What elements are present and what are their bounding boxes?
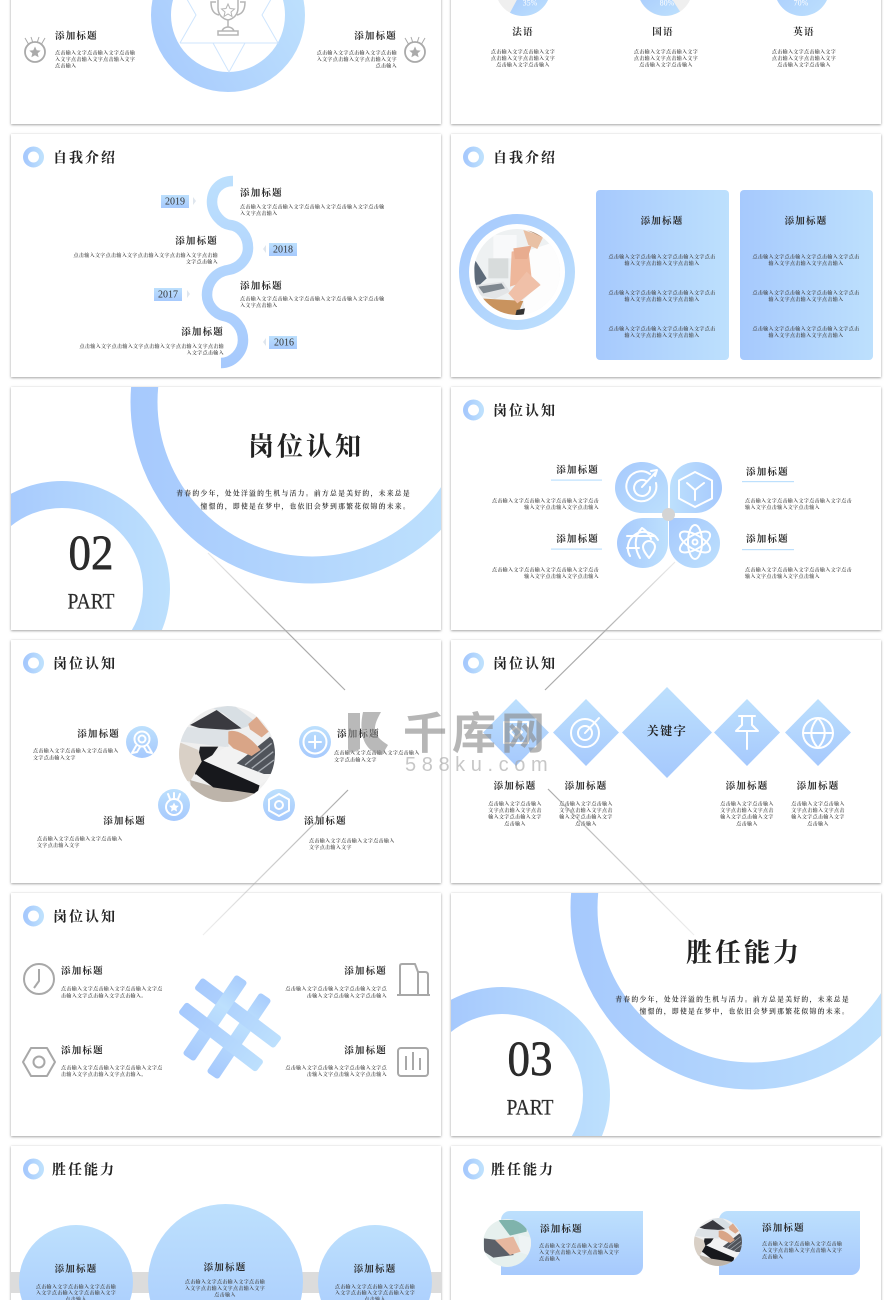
text column 2: 添加标题 [565,780,607,792]
text top-left [492,464,602,511]
body text [176,488,411,512]
circle right: 添加标题 [354,1263,396,1275]
heading: 岗位认知: 岗位认知 [493,656,557,672]
text bottom-right: 添加标题 [746,533,789,545]
panel: profile [451,134,881,377]
text upper-right: 添加标题 [344,965,387,977]
text upper-left: 添加标题 [61,965,104,977]
card one: 添加标题 [540,1223,583,1235]
text top-left: 点击输入文字点击输入文字点击输入文字点击 [492,498,599,504]
text 2019: 入文字点击输入 [240,210,277,217]
card right: 添加标题 [785,215,827,227]
text bottom-left: 点击输入文字点击输入文字点击输入文字点击 [492,566,599,574]
text upper-left: 文字点击输入文字 [33,754,76,762]
text 2016: 添加标题 [181,326,224,338]
text column 4: 添加标题 [797,780,839,792]
text column 3: 输入文字点击输入文字 [720,814,774,820]
text top-left: 添加标题 [556,464,599,476]
text top-left: 输入文字点击输入文字点击输入 [524,504,599,511]
right text block: 点击输入文字点击输入文字点击输 [317,50,397,56]
petal: cube [670,462,722,513]
petal: globe pin [617,518,668,568]
text 2017: 点击输入文字点击输入文字点击输入文字点击输入文字点击输 [240,296,384,302]
column: 法语: 法语 [512,26,534,38]
title: 岗位认知 [248,432,364,462]
card one [501,1211,643,1275]
text 2018: 点击输入文字点击输入文字点击输入文字点击输入文字点击输 [74,252,218,259]
card right: 输入文字点击输入文字点击输入 [769,260,843,267]
text column 1: 文字点击输入文字点击 [488,807,542,814]
watermark url: 588ku.com [405,754,553,776]
heading: 自我介绍 [466,149,557,166]
icon: nut [23,1048,55,1076]
year: 2019: 2019 [165,196,185,208]
text lower-left: 添加标题 [61,1044,104,1056]
card two [719,1211,860,1275]
text 2018: 文字点击输入 [186,258,218,266]
circle left [19,1225,133,1300]
panel: timeline [11,134,441,377]
card right: 点击输入文字点击输入文字点击输入文字点击 [752,290,860,296]
text column 4: 输入文字点击输入文字 [791,814,845,820]
text bottom-left: 添加标题 [556,533,599,545]
column: 英语: 点击输入文字点击输入文字 [772,48,836,56]
card right: 输入文字点击输入文字点击输入 [769,332,843,339]
column: 国语: 点击输入文字点击输入 [639,62,693,68]
card right: 输入文字点击输入文字点击输入 [769,296,843,303]
text column 1: 点击输入文字点击输入 [488,800,542,808]
diagonal line 1 [208,553,345,690]
watermark [348,710,553,776]
column: 法语: 点击输入文字点击输入文字 [491,48,555,56]
diagonal line 4 [548,789,694,935]
icon: left medal [25,37,45,62]
serpentine path [207,181,248,363]
heading: 岗位认知: 岗位认知 [53,656,117,672]
column: 英语: 点击输入文字点击输入 [777,62,831,68]
text bottom-right [742,533,852,580]
year: 2016: 2016 [274,336,294,348]
part number: PART [68,588,115,614]
photo two [694,1218,742,1266]
text upper-left: 点击输入文字点击输入文字点击输入文字点 [61,986,163,992]
text 2019 [240,187,384,217]
left text block: 入文字点击输入文字点击输入文字 [55,56,135,63]
text upper-right: 文字点击输入文字 [334,756,377,764]
pie: 70% [774,0,830,16]
diamond: keyword [622,687,712,778]
circle left: 添加标题 [55,1263,97,1275]
circle right [318,1225,432,1300]
diamond: frame [483,699,549,766]
column: 英语: 点击输入文字点击输入文字 [772,55,836,62]
card one: 入文字点击输入文字点击输入文字 [539,1249,619,1256]
text 2016: 入文字点击输入 [187,350,224,356]
clover icon group [615,462,722,568]
diagonal line 2 [545,562,675,690]
text upper-right [285,965,388,1000]
diagonal line 3 [203,790,348,935]
text column 2: 点击输入 [575,820,597,828]
heading: 岗位认知 [466,655,557,672]
card right: 点击输入文字点击输入文字点击输入文字点击 [752,254,860,260]
text lower-left [61,1044,163,1078]
text lower-right: 点击输入文字点击输入文字点击输入 [309,838,395,844]
text upper-left: 添加标题 [77,728,120,740]
text column 4: 文字点击输入文字点击 [791,807,845,814]
watermark logo [348,712,388,755]
circle left: 入文字点击输入文字点击输入文字 [36,1290,116,1296]
right text block: 点击输入 [376,62,397,70]
right text block [317,30,397,70]
left text block [55,30,135,70]
part number: 03 [508,1030,552,1086]
card left: 添加标题 [641,215,683,227]
heading: 岗位认知: 岗位认知 [493,402,557,420]
right text block: 入文字点击输入文字点击输入文字 [317,56,397,63]
text upper-right: 击输入文字点击输入文字点击输入 [307,992,387,1000]
left text block: 点击输入 [55,62,76,70]
diamond: pin [714,699,780,766]
text lower-right [285,1044,388,1078]
icon: star [158,789,190,821]
text lower-left: 点击输入文字点击输入文字点击输入文字点 [61,1064,163,1072]
title: 胜任能力 [686,938,802,968]
column: 国语: 点击输入文字点击输入文字 [634,55,698,62]
pie: 35% [496,0,550,16]
text 2018: 添加标题 [175,235,218,247]
text lower-left: 击输入文字点击输入文字点击输入。 [61,1071,147,1078]
icon: plus [299,726,331,758]
card two: 添加标题 [762,1222,805,1234]
text upper-left [33,728,120,762]
year: 2016 [263,336,297,349]
year: 2017: 2017 [158,288,178,300]
heading: 自我介绍 [26,149,117,166]
text column 2: 文字点击输入文字点击 [559,807,613,814]
text 2017: 入文字点击输入 [240,302,277,309]
icon: bar chart box [398,1048,428,1076]
text upper-right [334,728,420,764]
year: 2018 [263,243,297,256]
part number [68,524,115,614]
diamond: globe [785,699,851,766]
card left: 输入文字点击输入文字点击输入 [625,260,699,267]
photo: woman at laptop [474,229,549,315]
body text: 憧憬的，即使是在梦中，也依旧会梦到那繁花似锦的未来。 [639,1006,850,1016]
card two: 入文字点击输入文字点击输入文字 [762,1247,842,1254]
year: 2019 [161,195,196,208]
card two: 点击输入文字点击输入文字点击输 [762,1240,842,1248]
panel: section 02 [10,386,442,632]
text upper-left: 点击输入文字点击输入文字点击输入 [33,748,119,754]
text column 2: 输入文字点击输入文字 [559,814,613,820]
body text: 青春的少年，处处洋溢的生机与活力。前方总是美好的，未来总是 [615,994,850,1004]
card one: 点击输入 [539,1256,560,1262]
text 2016 [80,326,224,356]
card left [596,190,729,360]
pie: 80% [638,0,692,16]
part number: PART [506,1094,554,1120]
text 2019: 添加标题 [240,187,283,199]
text upper-left: 击输入文字点击输入文字点击输入。 [61,992,147,1000]
card right [740,190,873,360]
panel: keyword diamonds [451,640,881,883]
card one: 点击输入文字点击输入文字点击输 [539,1242,619,1250]
text lower-left: 点击输入文字点击输入文字点击输入 [37,836,123,842]
text top-right: 点击输入文字点击输入文字点击输入文字点击 [745,498,852,504]
text column 2 [559,780,613,828]
panel: award slide [11,0,441,124]
panel: clover [451,387,881,630]
year: 2017 [154,288,190,301]
text lower-left: 文字点击输入文字 [37,842,80,849]
text column 2: 点击输入文字点击输入 [559,800,613,808]
text upper-right: 添加标题 [337,728,380,740]
text upper-left [61,965,163,1000]
text column 4: 点击输入文字点击输入 [791,800,845,808]
text column 3: 添加标题 [726,780,768,792]
text column 3: 点击输入文字点击输入 [720,800,774,808]
text column 1: 添加标题 [494,780,536,792]
heading: 自我介绍: 自我介绍 [53,150,117,166]
text column 1: 输入文字点击输入文字 [488,814,542,820]
ring with star and trophy [161,0,295,82]
circle right: 点击输入文字点击输入文字点击输 [335,1284,415,1290]
text column 3 [720,780,774,828]
center dot [662,508,675,521]
column: 法语: 点击输入文字点击输入文字 [491,55,555,62]
text upper-right: 点击输入文字点击输入文字点击输入 [334,750,420,756]
panel: orbit photo [11,640,441,883]
text 2017: 添加标题 [240,280,283,292]
text lower-right: 击输入文字点击输入文字点击输入 [307,1071,387,1078]
icon: badge [126,726,158,758]
text lower-right: 文字点击输入文字 [309,844,352,851]
text upper-right: 点击输入文字点击输入文字点击输入文字点 [285,986,388,992]
decorative rings [11,387,441,630]
body text [615,994,850,1016]
decorative rings [451,893,881,1136]
card left: 点击输入文字点击输入文字点击输入文字点击 [608,290,716,296]
column: 法语 [491,26,555,68]
card two: 点击输入 [762,1254,783,1260]
photo: hands on laptop [179,706,275,802]
body text: 憧憬的，即使是在梦中，也依旧会梦到那繁花似锦的未来。 [200,502,411,512]
photo ring [464,219,570,325]
text column 4: 点击输入 [807,820,829,828]
panel: photo cards [451,1146,881,1300]
circle center: 点击输入 [214,1292,236,1298]
card left: 点击输入文字点击输入文字点击输入文字点击 [608,326,716,332]
watermark wordmark: 千库网 [403,710,550,758]
text top-right: 添加标题 [746,466,789,478]
text bottom-left: 输入文字点击输入文字点击输入 [524,573,599,580]
column: 国语 [634,26,698,68]
heading: 胜任能力 [466,1161,555,1178]
diamond: target [553,699,619,766]
heading: 岗位认知 [466,402,557,420]
photo one [483,1219,531,1267]
circle right: 入文字点击输入文字点击输入文字 [335,1290,415,1296]
petal: atom [669,518,720,568]
card left: 输入文字点击输入文字点击输入 [625,296,699,303]
panel: hash [11,893,441,1136]
right text block: 添加标题 [354,30,397,42]
heading: 胜任能力 [26,1161,116,1178]
column: 英语: 英语 [793,26,815,38]
heading: 胜任能力: 胜任能力 [491,1162,555,1178]
circle center [148,1204,303,1300]
text column 1 [488,780,542,828]
text column 4 [791,780,845,828]
panel: language pies [451,0,881,124]
circle left: 点击输入文字点击输入文字点击输 [36,1284,116,1290]
column: 英语 [772,26,836,68]
icon: hash symbol [178,974,282,1080]
column: 国语: 点击输入文字点击输入文字 [634,48,698,56]
column: 法语: 点击输入文字点击输入 [496,62,550,68]
text 2019: 点击输入文字点击输入文字点击输入文字点击输入文字点击输 [240,204,384,210]
grey band [11,1272,441,1293]
panel: three circles [11,1146,441,1300]
diamond: keyword: 关键字 [647,723,687,738]
text top-right: 输入文字点击输入文字点击输入 [745,504,820,511]
left text block: 添加标题 [55,30,98,42]
text lower-left: 添加标题 [103,815,146,827]
card left: 点击输入文字点击输入文字点击输入文字点击 [608,254,716,260]
text lower-left [37,815,146,849]
circle center: 入文字点击输入文字点击输入文字 [185,1285,265,1292]
text lower-right: 点击输入文字点击输入文字点击输入文字点 [285,1064,388,1072]
circle center: 点击输入文字点击输入文字点击输 [185,1278,265,1286]
text lower-right: 添加标题 [344,1044,387,1056]
text 2016: 点击输入文字点击输入文字点击输入文字点击输入文字点击输 [80,343,224,350]
card left: 输入文字点击输入文字点击输入 [625,332,699,339]
heading: 岗位认知 [26,655,117,672]
text 2018 [74,235,218,266]
year: 2018: 2018 [273,244,293,256]
text top-right [742,466,852,511]
petal: target [615,462,668,513]
heading: 岗位认知 [26,908,117,926]
text bottom-right: 输入文字点击输入文字点击输入 [745,573,820,580]
body text: 青春的少年，处处洋溢的生机与活力。前方总是美好的，未来总是 [176,488,411,498]
text bottom-left [492,533,602,580]
column: 国语: 国语 [652,26,674,38]
text lower-right: 添加标题 [304,815,347,827]
panel: section 03 [450,892,882,1138]
text lower-right [304,815,395,851]
text column 1: 点击输入 [504,820,526,828]
part number: 02 [68,524,114,580]
heading: 胜任能力: 胜任能力 [52,1162,116,1178]
text column 3: 文字点击输入文字点击 [720,807,774,814]
part number [506,1030,554,1120]
circle center: 添加标题 [204,1262,246,1274]
icon: clock [24,964,54,994]
heading: 岗位认知: 岗位认知 [53,908,117,926]
icon: building [397,964,430,995]
left text block: 点击输入文字点击输入文字点击输 [55,50,135,56]
icon: right medal [405,37,425,62]
text bottom-right: 点击输入文字点击输入文字点击输入文字点击 [745,566,852,574]
card right: 点击输入文字点击输入文字点击输入文字点击 [752,326,860,332]
icon: hexagon [263,789,295,821]
text column 3: 点击输入 [736,820,758,828]
heading: 自我介绍: 自我介绍 [493,150,557,166]
text 2017 [240,280,384,309]
